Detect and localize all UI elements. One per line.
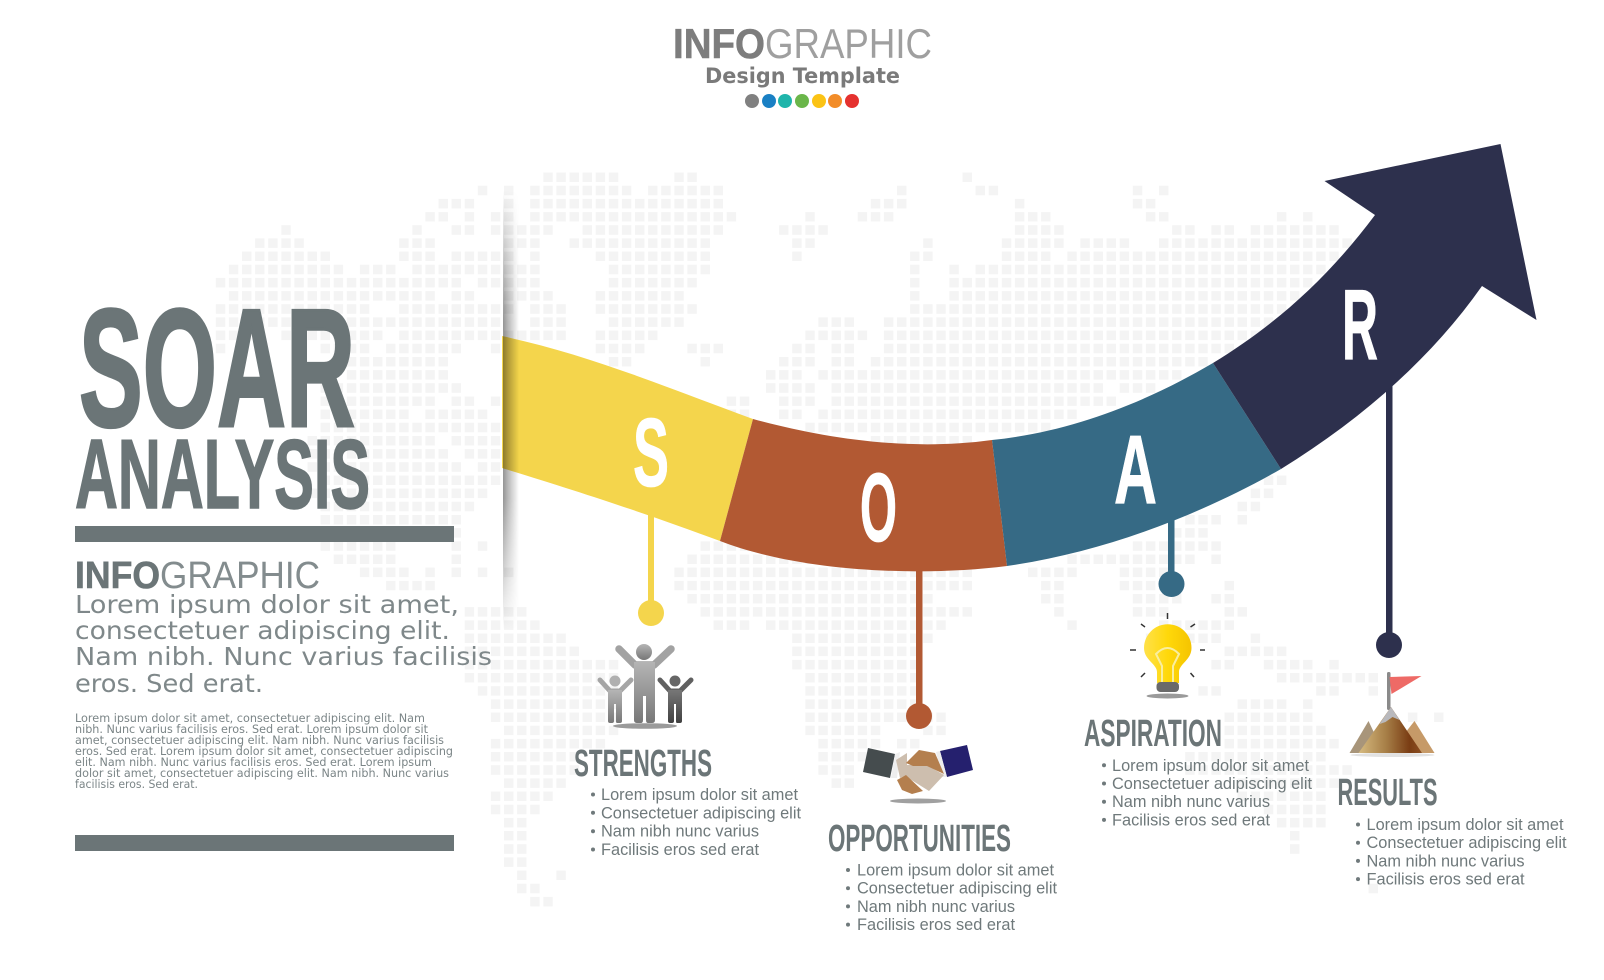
- bullet list: results: Nam nibh nunc varius: [1366, 852, 1524, 870]
- icon: three people: [600, 644, 691, 729]
- bullet list: results: Consectetuer adipiscing elit: [1366, 834, 1567, 852]
- intro paragraph: eros. Sed erat.: [75, 669, 263, 698]
- header title: INFO: [673, 20, 765, 67]
- bottom rule: [75, 835, 454, 851]
- segment O orange: [720, 419, 1007, 571]
- segment S yellow: [502, 336, 753, 541]
- sub-heading: infographic: GRAPHIC: [160, 555, 320, 597]
- heading: opportunities: OPPORTUNITIES: [828, 818, 1011, 860]
- small body paragraph: amet, consectetuer adipiscing elit. Nam nibh. Nunc varius facilisis: [75, 733, 444, 747]
- small body paragraph: nibh. Nunc varius facilisis eros. Sed erat. Lorem ipsum dolor sit: [75, 722, 428, 736]
- pin: strengths: [638, 500, 664, 626]
- curved SOAR arrow: O: [860, 453, 897, 562]
- bullet list: results: Facilisis eros sed erat: [1366, 871, 1525, 889]
- sub-heading: infographic: INFO: [75, 555, 160, 597]
- icon: light bulb: [1130, 613, 1205, 698]
- bullet list: aspiration: Consectetuer adipiscing elit: [1112, 775, 1312, 793]
- intro paragraph: [75, 590, 492, 698]
- heading: ANALYSIS: ANALYSIS: [75, 419, 370, 529]
- bullet list: aspiration: Lorem ipsum dolor sit amet: [1112, 757, 1309, 775]
- panel: left title and intro: [75, 274, 492, 851]
- small body paragraph: dolor sit amet, consectetuer adipiscing elit. Nam nibh. Nunc varius: [75, 766, 449, 780]
- small body paragraph: elit. Nam nibh. Nunc varius facilisis eros. Sed erat. Lorem ipsum: [75, 755, 432, 769]
- header subtitle: Design Template: [705, 64, 900, 88]
- letter A: A: [1114, 415, 1157, 524]
- heading: results: RESULTS: [1338, 772, 1438, 814]
- header title: GRAPHIC: [765, 20, 932, 67]
- bullet list: opportunities: [846, 862, 1057, 934]
- small body paragraph: [75, 711, 453, 791]
- bullet list: opportunities: Lorem ipsum dolor sit amet: [857, 862, 1054, 880]
- bullet list: aspiration: Nam nibh nunc varius: [1112, 793, 1270, 811]
- bullet list: results: Lorem ipsum dolor sit amet: [1366, 816, 1564, 834]
- intro paragraph: consectetuer adipiscing elit.: [75, 616, 450, 645]
- bullet list: strengths: [591, 786, 801, 859]
- dotted world map background: [216, 177, 1444, 902]
- pin: aspiration: [1158, 520, 1184, 597]
- bullet list: strengths: Nam nibh nunc varius: [601, 823, 759, 841]
- bullet list: opportunities: Facilisis eros sed erat: [857, 916, 1015, 934]
- segment A teal: [992, 363, 1281, 566]
- icon: handshake: [863, 745, 973, 804]
- connector stems and pins: [638, 375, 1402, 729]
- panel: opportunities: [828, 745, 1057, 934]
- pin: opportunities: [906, 560, 932, 729]
- heading: SOAR: SOAR: [79, 274, 355, 462]
- letter S: S: [633, 398, 669, 507]
- intro paragraph: Nam nibh. Nunc varius facilisis: [75, 642, 492, 671]
- top rule: [75, 526, 454, 542]
- curved SOAR arrow: [502, 144, 1536, 630]
- band shadow: [503, 200, 518, 619]
- icon: mountain with flag: [1350, 672, 1434, 757]
- bullet list: strengths: Facilisis eros sed erat: [601, 841, 759, 859]
- small body paragraph: facilisis eros. Sed erat.: [75, 777, 198, 791]
- header: infographic design template: [673, 20, 932, 108]
- bullet list: aspiration: Facilisis eros sed erat: [1112, 811, 1270, 829]
- bullet list: strengths: Lorem ipsum dolor sit amet: [601, 786, 798, 804]
- panel: strengths: [574, 644, 801, 859]
- bullet list: strengths: Consectetuer adipiscing elit: [601, 804, 801, 822]
- small body paragraph: eros. Sed erat. Lorem ipsum dolor sit amet, consectetuer adipiscing: [75, 744, 453, 758]
- curved SOAR arrow: R: [1342, 269, 1378, 381]
- heading: strengths: STRENGTHS: [574, 743, 712, 785]
- bullet list: opportunities: Consectetuer adipiscing elit: [857, 880, 1057, 898]
- panel: aspiration: [1084, 613, 1312, 829]
- segment R navy arrow head: [1213, 144, 1536, 469]
- pin: results: [1376, 375, 1402, 658]
- heading: aspiration: ASPIRATION: [1084, 713, 1222, 755]
- header colour dots: [745, 94, 859, 108]
- small body paragraph: Lorem ipsum dolor sit amet, consectetuer adipiscing elit. Nam: [75, 711, 425, 725]
- bullet list: aspiration: [1102, 757, 1312, 829]
- panel: results: [1338, 672, 1567, 889]
- bullet list: results: [1356, 816, 1567, 889]
- intro paragraph: Lorem ipsum dolor sit amet,: [75, 590, 459, 619]
- bullet list: opportunities: Nam nibh nunc varius: [857, 898, 1015, 916]
